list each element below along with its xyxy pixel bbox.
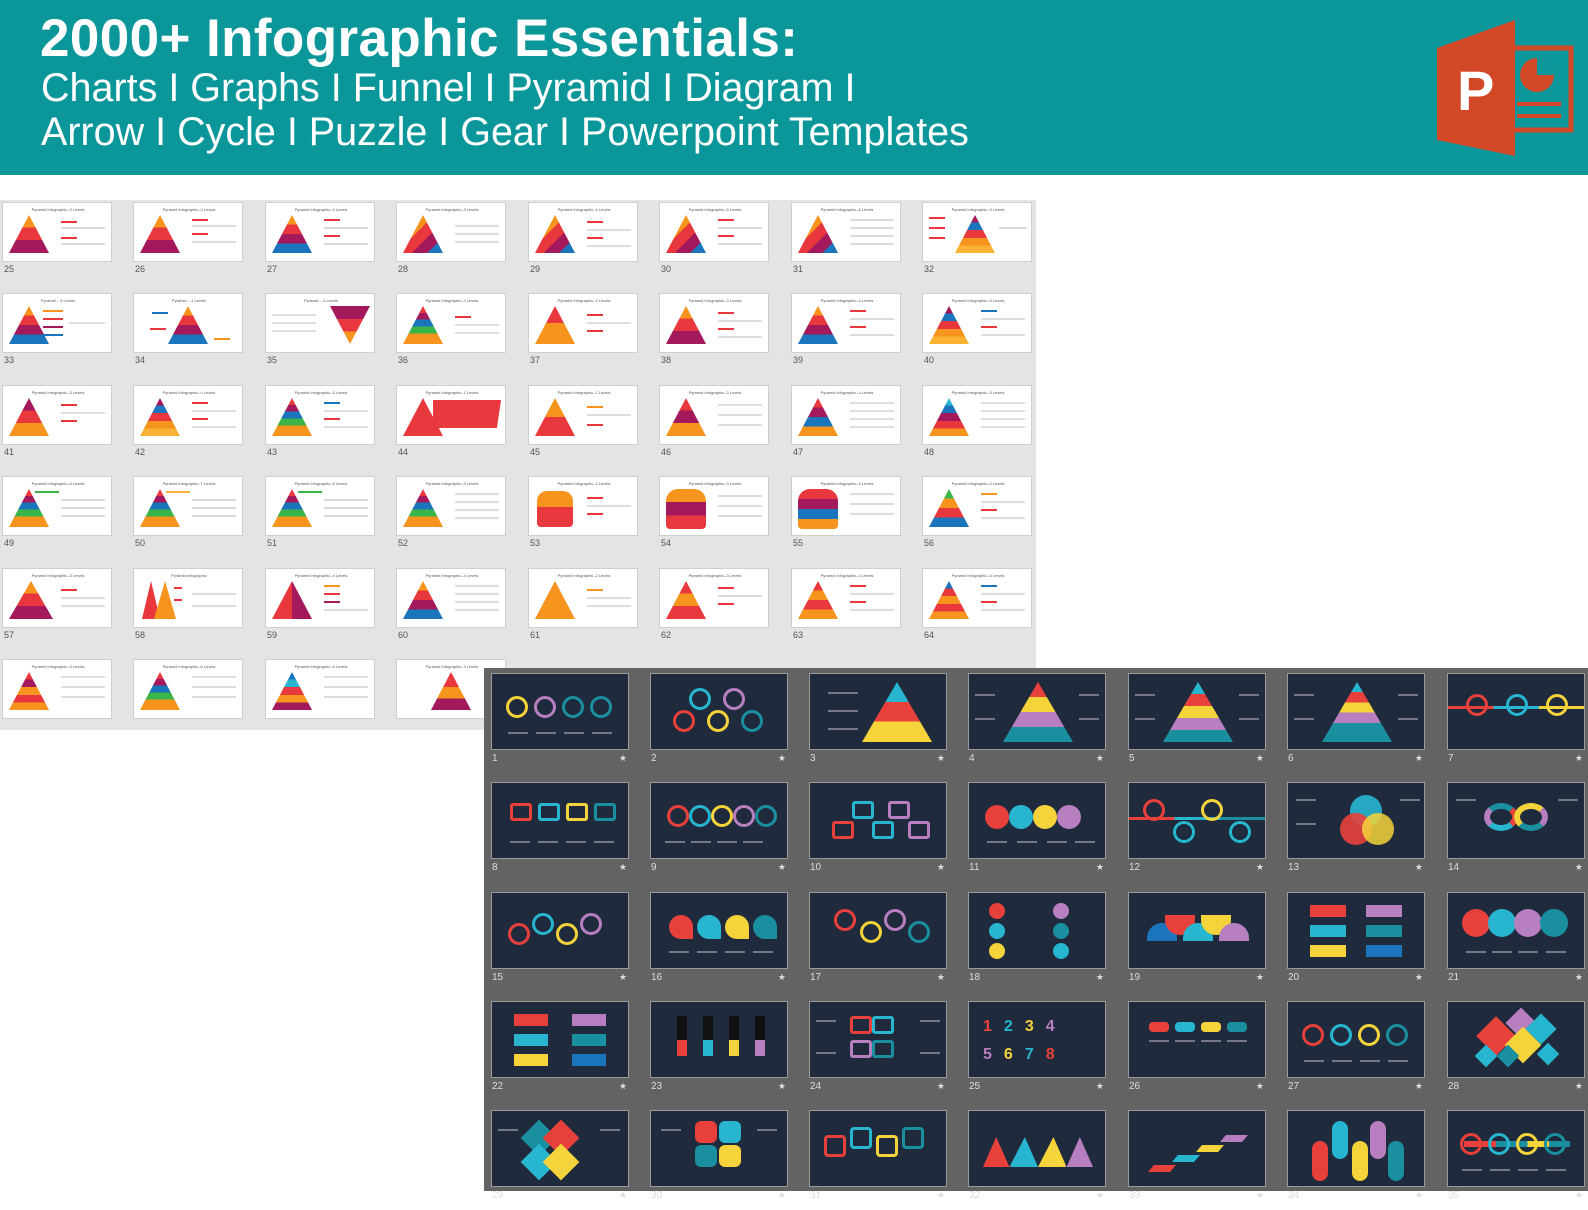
slide 49: 49	[4, 538, 14, 548]
slide 27	[265, 202, 375, 274]
slide 62	[659, 568, 769, 640]
slide 38: Pyramid Infographic–3 Levels	[689, 298, 741, 303]
slide 34: 34	[135, 355, 145, 365]
slide 64: Pyramid Infographic–5 Levels	[952, 573, 1004, 578]
dark slide 34: ★	[1415, 1190, 1423, 1200]
slide 52	[396, 476, 506, 548]
dark slide 4: ★	[1096, 753, 1104, 763]
slide 32: 32	[924, 264, 934, 274]
slide 54: 54	[661, 538, 671, 548]
dark slide 12: 12	[1129, 862, 1140, 873]
dark slide 31: ★	[937, 1190, 945, 1200]
slide 42: 42	[135, 447, 145, 457]
slide 41: Pyramid Infographic–3 Levels	[32, 390, 84, 395]
dark slide 12: ★	[1256, 862, 1264, 872]
slide 34: Pyramid – 4 Levels	[172, 298, 206, 303]
dark slide 29	[491, 1110, 629, 1201]
slide 42	[133, 385, 243, 457]
slide 29: Pyramid Infographic–4 Levels	[558, 207, 610, 212]
dark slide 14	[1447, 782, 1585, 873]
dark slide 20: ★	[1415, 972, 1423, 982]
slide 41: 41	[4, 447, 14, 457]
slide 53: 53	[530, 538, 540, 548]
subtitle line 2: Arrow I Cycle I Puzzle I Gear I Powerpoint Templates	[41, 110, 969, 154]
icon: powerpoint logo	[1437, 20, 1574, 156]
slide 40: 40	[924, 355, 934, 365]
dark slide 33: 33	[1129, 1190, 1140, 1201]
dark slide 2: ★	[778, 753, 786, 763]
slide 28: Pyramid Infographic–3 Levels	[426, 207, 478, 212]
dark slide 28	[1447, 1001, 1585, 1092]
dark slide 32: ★	[1096, 1190, 1104, 1200]
slide 61	[528, 568, 638, 640]
slide 29: 29	[530, 264, 540, 274]
dark slide 2	[650, 673, 788, 764]
dark slide 13	[1287, 782, 1425, 873]
dark slide 10	[809, 782, 947, 873]
slide 44: 44	[398, 447, 408, 457]
slide 55: Pyramid Infographic–4 Levels	[821, 481, 873, 486]
slide 30: Pyramid Infographic–5 Levels	[689, 207, 741, 212]
dark slide 25: 1234	[983, 1018, 1067, 1035]
slide 31	[791, 202, 901, 274]
slide 25	[2, 202, 112, 274]
slide 60: Pyramid Infographic–4 Levels	[426, 573, 478, 578]
slide 37	[528, 293, 638, 365]
dark slide 28: ★	[1575, 1081, 1583, 1091]
slide 67	[265, 659, 375, 719]
dark slide 8: ★	[619, 862, 627, 872]
dark slide 19: 19	[1129, 972, 1140, 983]
slide 47	[791, 385, 901, 457]
slide 48: 48	[924, 447, 934, 457]
dark slide 32	[968, 1110, 1106, 1201]
slide 39: 39	[793, 355, 803, 365]
slide 59	[265, 568, 375, 640]
dark slide 21: ★	[1575, 972, 1583, 982]
slide 48: Pyramid Infographic–5 Levels	[952, 390, 1004, 395]
dark slide 27: 27	[1288, 1081, 1299, 1092]
dark slide 7: ★	[1575, 753, 1583, 763]
dark slide 34: 34	[1288, 1190, 1299, 1201]
slide 45: 45	[530, 447, 540, 457]
slide 28	[396, 202, 506, 274]
dark slide 23: 23	[651, 1081, 662, 1092]
dark slide 4	[968, 673, 1106, 764]
dark slide 13: ★	[1415, 862, 1423, 872]
slide 56: 56	[924, 538, 934, 548]
slide 65: Pyramid Infographic–5 Levels	[32, 664, 84, 669]
slide 56: Pyramid Infographic–4 Levels	[952, 481, 1004, 486]
slide 35: 35	[267, 355, 277, 365]
slide 33: Pyramid – 4 Levels	[41, 298, 75, 303]
dark slide 26: ★	[1256, 1081, 1264, 1091]
slide 50: 50	[135, 538, 145, 548]
slide 46: 46	[661, 447, 671, 457]
dark slide 18: ★	[1096, 972, 1104, 982]
slide 27: 27	[267, 264, 277, 274]
dark slide 18	[968, 892, 1106, 983]
slide 43: Pyramid Infographic–5 Levels	[295, 390, 347, 395]
slide 32: Pyramid Infographic–5 Levels	[952, 207, 1004, 212]
dark slide 8: 8	[492, 862, 498, 873]
slide 45	[528, 385, 638, 457]
dark slide 22: ★	[619, 1081, 627, 1091]
slide 31: Pyramid Infographic–6 Levels	[821, 207, 873, 212]
slide 51: Pyramid Infographic–8 Levels	[295, 481, 347, 486]
slide 46: Pyramid Infographic–3 Levels	[689, 390, 741, 395]
dark slide 20	[1287, 892, 1425, 983]
slide 54: Pyramid Infographic–3 Levels	[689, 481, 741, 486]
slide 50: Pyramid Infographic–7 Levels	[163, 481, 215, 486]
slide 47: Pyramid Infographic–4 Levels	[821, 390, 873, 395]
slide 52: Pyramid Infographic–9 Levels	[426, 481, 478, 486]
slide 59: 59	[267, 630, 277, 640]
slide 50	[133, 476, 243, 548]
dark slide 22: 22	[492, 1081, 503, 1092]
slide 57: 57	[4, 630, 14, 640]
slide 28: 28	[398, 264, 408, 274]
dark slide 5: ★	[1256, 753, 1264, 763]
dark slide 17: ★	[937, 972, 945, 982]
slide 60	[396, 568, 506, 640]
dark slide 9	[650, 782, 788, 873]
dark slide 35	[1447, 1110, 1585, 1210]
dark slide 8	[491, 782, 629, 873]
dark slide 29: ★	[619, 1190, 627, 1200]
dark slide 25: 25	[969, 1081, 980, 1092]
slide 44	[396, 385, 506, 457]
slide 30: 30	[661, 264, 671, 274]
slide 26: 26	[135, 264, 145, 274]
dark slide 16	[650, 892, 788, 983]
dark slide 7	[1447, 673, 1585, 764]
dark slide 35: 35	[1448, 1190, 1459, 1201]
slide 60: 60	[398, 630, 408, 640]
slide 29	[528, 202, 638, 274]
icon: powerpoint logo: P	[1457, 59, 1494, 122]
slide 59: Pyramid Infographic–4 Levels	[295, 573, 347, 578]
slide 68: Pyramid Infographic–3 Levels	[426, 664, 478, 669]
slide 40	[922, 293, 1032, 365]
dark slide 22	[491, 1001, 629, 1092]
dark slide 6: ★	[1415, 753, 1423, 763]
slide 35: Pyramid – 3 Levels	[304, 298, 338, 303]
dark slide 23	[650, 1001, 788, 1092]
dark slide 32: 32	[969, 1190, 980, 1201]
dark slide 34	[1287, 1110, 1425, 1201]
dark slide 4: 4	[969, 753, 975, 764]
slide 61: 61	[530, 630, 540, 640]
dark slide 6	[1287, 673, 1425, 764]
dark slide 1	[491, 673, 629, 764]
dark slide 21	[1447, 892, 1585, 983]
dark slide 18: 18	[969, 972, 980, 983]
slide 67: Pyramid Infographic–6 Levels	[295, 664, 347, 669]
dark slide 10: 10	[810, 862, 821, 873]
slide 26	[133, 202, 243, 274]
dark slide 3	[809, 673, 947, 764]
slide 44: Pyramid Infographic–1 Levels	[426, 390, 478, 395]
header band	[0, 0, 1588, 175]
title: 2000+ Infographic Essentials:	[40, 9, 798, 68]
dark slide 25	[968, 1001, 1106, 1092]
slide 25: 25	[4, 264, 14, 274]
slide 56	[922, 476, 1032, 548]
dark slide 16: 16	[651, 972, 662, 983]
slide 54	[659, 476, 769, 548]
slide 55	[791, 476, 901, 548]
dark slide 28: 28	[1448, 1081, 1459, 1092]
slide 62: 62	[661, 630, 671, 640]
dark slide 31	[809, 1110, 947, 1201]
dark slide 15: 15	[492, 972, 503, 983]
slide 31: 31	[793, 264, 803, 274]
slide 64: 64	[924, 630, 934, 640]
slide 66: Pyramid Infographic–6 Levels	[163, 664, 215, 669]
dark slide 25: 5678	[983, 1046, 1067, 1063]
slide 63: 63	[793, 630, 803, 640]
dark slide 29: 29	[492, 1190, 503, 1201]
slide 52: 52	[398, 538, 408, 548]
slide 63	[791, 568, 901, 640]
dark slide 16: ★	[778, 972, 786, 982]
slide 51	[265, 476, 375, 548]
slide 57	[2, 568, 112, 640]
dark slide 10: ★	[937, 862, 945, 872]
dark slide 9: 9	[651, 862, 657, 873]
slide 55: 55	[793, 538, 803, 548]
slide 45: Pyramid Infographic–2 Levels	[558, 390, 610, 395]
dark slide 21: 21	[1448, 972, 1459, 983]
dark slide 24: ★	[937, 1081, 945, 1091]
dark slide 33	[1128, 1110, 1266, 1201]
dark slide 11	[968, 782, 1106, 873]
slide 58: Pyramid Infographic	[171, 573, 207, 578]
dark slide 1: ★	[619, 753, 627, 763]
dark slide 26	[1128, 1001, 1266, 1092]
dark slide 17: 17	[810, 972, 821, 983]
dark slide 24	[809, 1001, 947, 1092]
slide 66	[133, 659, 243, 719]
slide 34	[133, 293, 243, 365]
slide 33: 33	[4, 355, 14, 365]
slide 41	[2, 385, 112, 457]
dark slide 14: ★	[1575, 862, 1583, 872]
slide 35	[265, 293, 375, 365]
slide 36: 36	[398, 355, 408, 365]
slide 65	[2, 659, 112, 719]
panel: light pyramid slides grid	[0, 200, 1036, 730]
dark slide 19	[1128, 892, 1266, 983]
dark slide 2: 2	[651, 753, 657, 764]
slide 68	[396, 659, 506, 719]
slide 30	[659, 202, 769, 274]
dark slide 35: ★	[1575, 1190, 1583, 1200]
slide 53	[528, 476, 638, 548]
dark slide 20: 20	[1288, 972, 1299, 983]
dark slide 23: ★	[778, 1081, 786, 1091]
dark slide 27: ★	[1415, 1081, 1423, 1091]
panel: dark infographic slides grid	[484, 668, 1588, 1191]
slide 38	[659, 293, 769, 365]
dark slide 5: 5	[1129, 753, 1135, 764]
slide 36: Pyramid Infographic–4 Levels	[426, 298, 478, 303]
slide 62: Pyramid Infographic–3 Levels	[689, 573, 741, 578]
dark slide 31: 31	[810, 1190, 821, 1201]
dark slide 33: ★	[1256, 1190, 1264, 1200]
dark slide 14: 14	[1448, 862, 1459, 873]
slide 37: 37	[530, 355, 540, 365]
slide 46	[659, 385, 769, 457]
slide 42: Pyramid Infographic–4 Levels	[163, 390, 215, 395]
dark slide 13: 13	[1288, 862, 1299, 873]
slide 39: Pyramid Infographic–4 Levels	[821, 298, 873, 303]
slide 61: Pyramid Infographic–2 Levels	[558, 573, 610, 578]
dark slide 3: 3	[810, 753, 816, 764]
slide 43	[265, 385, 375, 457]
dark slide 7: 7	[1448, 753, 1454, 764]
slide 53: Pyramid Infographic–2 Levels	[558, 481, 610, 486]
dark slide 26: 26	[1129, 1081, 1140, 1092]
slide 64	[922, 568, 1032, 640]
dark slide 9: ★	[778, 862, 786, 872]
dark slide 3: ★	[937, 753, 945, 763]
slide 51: 51	[267, 538, 277, 548]
slide 43: 43	[267, 447, 277, 457]
slide 49: Pyramid Infographic–6 Levels	[32, 481, 84, 486]
dark slide 19: ★	[1256, 972, 1264, 982]
dark slide 24: 24	[810, 1081, 821, 1092]
slide 58: 58	[135, 630, 145, 640]
slide 38: 38	[661, 355, 671, 365]
slide 26: Pyramid Infographic–3 Levels	[163, 207, 215, 212]
slide 39	[791, 293, 901, 365]
slide 48	[922, 385, 1032, 457]
dark slide 17	[809, 892, 947, 983]
dark slide 27	[1287, 1001, 1425, 1092]
dark slide 6: 6	[1288, 753, 1294, 764]
dark slide 30	[650, 1110, 788, 1201]
dark slide 1: 1	[492, 753, 498, 764]
dark slide 30: ★	[778, 1190, 786, 1200]
slide 47: 47	[793, 447, 803, 457]
dark slide 11: ★	[1096, 862, 1104, 872]
slide 33	[2, 293, 112, 365]
dark slide 25: ★	[1096, 1081, 1104, 1091]
slide 63: Pyramid Infographic–4 Levels	[821, 573, 873, 578]
slide 57: Pyramid Infographic–3 Levels	[32, 573, 84, 578]
dark slide 5	[1128, 673, 1266, 764]
slide 40: Pyramid Infographic–5 Levels	[952, 298, 1004, 303]
dark slide 15	[491, 892, 629, 983]
slide 32	[922, 202, 1032, 274]
slide 58	[133, 568, 243, 640]
slide 37: Pyramid Infographic–2 Levels	[558, 298, 610, 303]
dark slide 30: 30	[651, 1190, 662, 1201]
slide 27: Pyramid Infographic–4 Levels	[295, 207, 347, 212]
slide 36	[396, 293, 506, 365]
dark slide 15: ★	[619, 972, 627, 982]
dark slide 11: 11	[969, 862, 979, 873]
slide 49	[2, 476, 112, 548]
dark slide 12	[1128, 782, 1266, 873]
subtitle line 1: Charts I Graphs I Funnel I Pyramid I Diagram I	[41, 66, 855, 110]
slide 25: Pyramid Infographic–3 Levels	[32, 207, 84, 212]
